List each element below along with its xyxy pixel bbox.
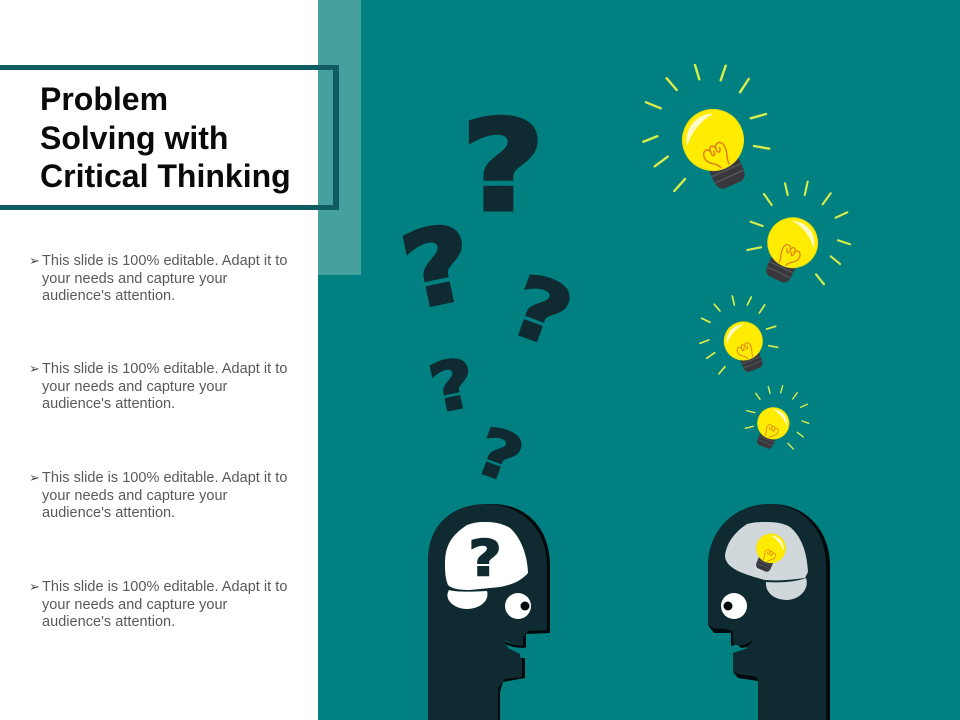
bullet text 1 [29,253,287,304]
bullet text 4: This slide is 100% editable. Adapt it to [42,579,287,595]
bullet text 3 [29,470,287,521]
bullet text 1: ➢ [29,254,40,269]
bullet text 3: audience's attention. [42,505,175,521]
head shadow [440,504,550,720]
light bulb 4 [745,386,809,453]
title [40,81,291,194]
eye [721,593,747,619]
bullet text 1: your needs and capture your [42,270,227,286]
teal background panel [318,0,960,720]
right head with light bulb [708,504,830,720]
brain lower lobe [766,578,807,600]
light bulb 2 [747,182,850,290]
bullet text 1: audience's attention. [42,288,175,304]
title: Solving with [40,120,228,156]
bullet text 3: your needs and capture your [42,488,227,504]
light bulb 1 [643,65,769,197]
bullet text 3: ➢ [29,471,40,486]
bullet text 2: This slide is 100% editable. Adapt it to [42,361,287,377]
head silhouette [708,504,826,720]
bullet text 3: This slide is 100% editable. Adapt it to [42,470,287,486]
title frame [0,65,339,210]
bullet text 1: This slide is 100% editable. Adapt it to [42,253,287,269]
question mark 1: ? [461,94,545,239]
smile line [738,640,752,648]
pupil [520,602,530,610]
question mark 3: ? [498,257,584,367]
title: Critical Thinking [40,158,291,194]
question mark 5: ? [466,412,532,499]
pupil [724,602,732,610]
brain lower lobe [447,590,487,609]
brain top [725,522,808,580]
head silhouette [428,504,547,720]
light teal accent block [318,0,361,275]
head shadow [708,504,830,720]
bullet text 2: audience's attention. [42,396,175,412]
bullet text 4: your needs and capture your [42,596,227,612]
bullet text 2: your needs and capture your [42,378,227,394]
smile line [505,641,525,648]
bulb in brain [748,529,790,576]
bullet text 2: ➢ [29,362,40,377]
question mark 2: ? [392,202,484,334]
bullet text 4: ➢ [29,580,40,595]
lower jaw notch [507,648,525,653]
brain top [445,522,528,590]
eye [505,593,531,619]
light bulb 3 [700,296,778,377]
question mark in brain: ? [468,529,502,588]
title: Problem [40,81,168,117]
bullet text 4 [29,579,287,630]
question mark 4: ? [423,344,483,429]
left head with question mark [428,504,550,720]
bullet text 2 [29,361,287,412]
bullet text 4: audience's attention. [42,614,175,630]
